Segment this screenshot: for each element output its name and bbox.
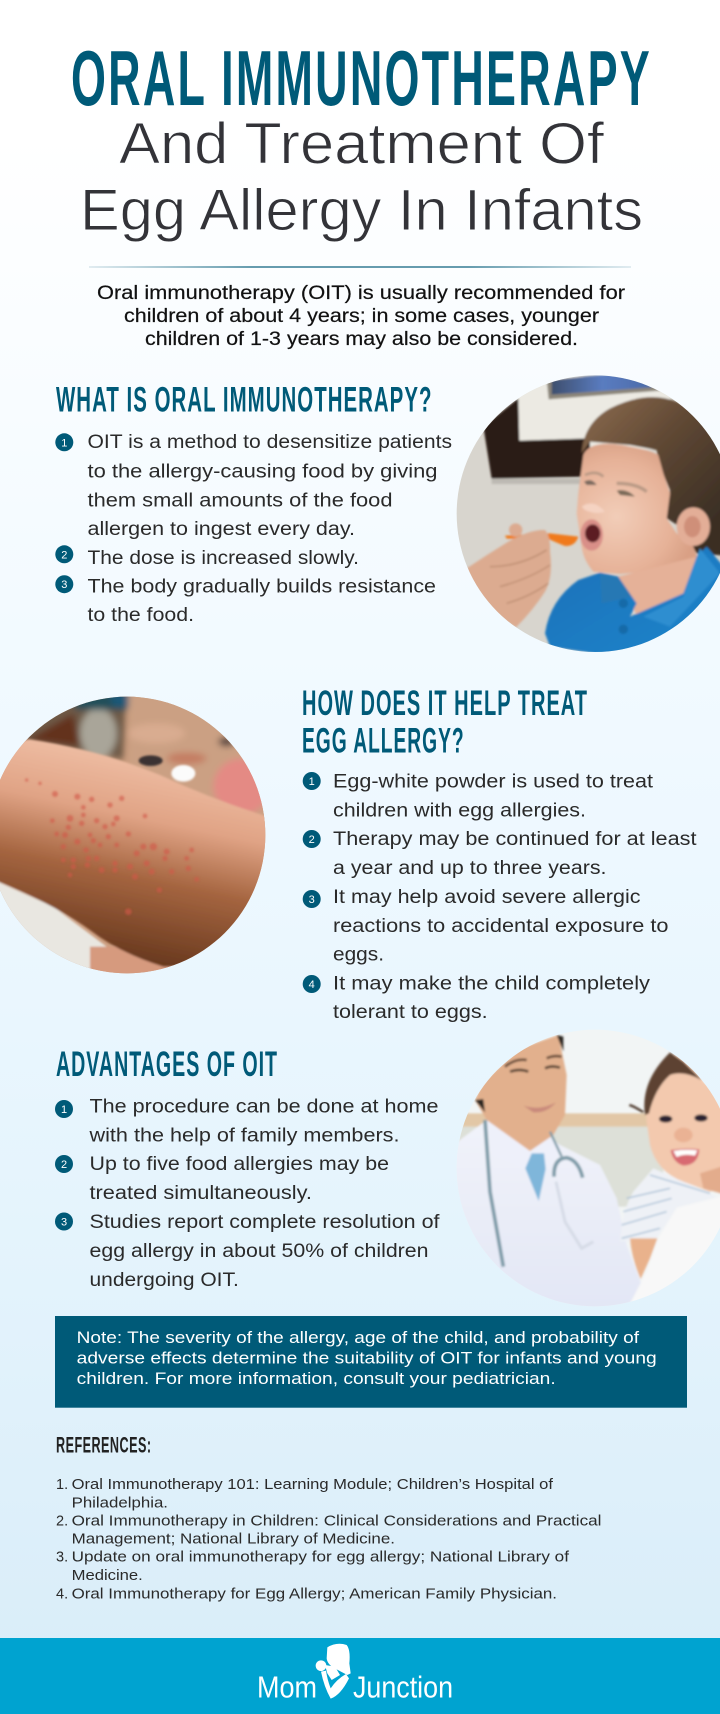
references list: 4. <box>56 1586 68 1602</box>
intro text <box>97 283 626 350</box>
references heading: REFERENCES: <box>56 1433 152 1458</box>
list item 1: with the help of family members. <box>88 1126 400 1146</box>
list item 1: children with egg allergies. <box>333 801 586 822</box>
list item 2: a year and up to three years. <box>333 858 606 879</box>
photo: rash on infant arm <box>0 696 266 974</box>
references list: Oral Immunotherapy in Children: Clinical Considerations and Practical <box>72 1513 602 1529</box>
intro text: children of 1-3 years may also be considered. <box>145 329 578 350</box>
list item 3: 3 <box>309 894 315 906</box>
footer band <box>0 1638 720 1714</box>
list item 1: Egg-white powder is used to treat <box>333 772 654 792</box>
list item 2: Up to five food allergies may be <box>90 1154 389 1175</box>
list item 1: them small amounts of the food <box>88 490 392 511</box>
list item 1: The procedure can be done at home <box>90 1096 438 1117</box>
list item 3: The body gradually builds resistance <box>88 577 436 598</box>
references list <box>56 1477 602 1602</box>
photo: boy being fed from a spoon <box>450 370 720 660</box>
list item 3 <box>303 887 668 966</box>
list item 3: It may help avoid severe allergic <box>333 887 640 908</box>
photo: doctor with smiling baby <box>450 1025 720 1315</box>
references list: Oral Immunotherapy 101: Learning Module; Children’s Hospital of <box>72 1477 554 1493</box>
list item 1 <box>303 772 654 822</box>
title: Egg Allergy In Infants <box>80 178 643 243</box>
intro text: children of about 4 years; in some cases, younger <box>124 306 600 327</box>
references list: Management; National Library of Medicine. <box>72 1532 395 1548</box>
list item 3 <box>55 575 436 626</box>
list item 2: Therapy may be continued for at least <box>333 829 697 850</box>
references list: Philadelphia. <box>72 1495 168 1511</box>
list item 4: 4 <box>309 979 315 991</box>
list item 2: 2 <box>61 549 67 561</box>
references list: Oral Immunotherapy for Egg Allergy; American Family Physician. <box>72 1586 557 1602</box>
references list: 3. <box>56 1550 68 1566</box>
list item 1: 1 <box>309 776 315 788</box>
list item 1: allergen to ingest every day. <box>88 519 355 540</box>
callout: note: adverse effects determine the suitability of OIT for infants and young <box>77 1350 657 1368</box>
references list: 2. <box>56 1513 68 1529</box>
panel: advantages of OIT <box>55 1044 440 1291</box>
heading: how does it help: EGG ALLERGY? <box>302 721 465 761</box>
title: And Treatment Of <box>119 111 605 176</box>
list item 2: The dose is increased slowly. <box>88 548 359 569</box>
list item 1 <box>55 432 452 540</box>
list item 2: treated simultaneously. <box>90 1183 312 1204</box>
list item 2 <box>303 829 697 879</box>
list item 3: 3 <box>61 1216 67 1228</box>
logo: MomJunction <box>257 1644 453 1704</box>
list item 1: 1 <box>61 437 67 449</box>
list item 3: reactions to accidental exposure to <box>333 916 668 937</box>
heading: how does it help <box>302 683 588 761</box>
list item 1: to the allergy-causing food by giving <box>88 461 438 482</box>
intro text: Oral immunotherapy (OIT) is usually recommended for <box>97 283 626 304</box>
list item 3: egg allergy in about 50% of children <box>90 1241 428 1262</box>
heading: what is oral immunotherapy: WHAT IS ORAL IMMUNOTHERAPY? <box>56 380 432 420</box>
list item 2: 2 <box>309 834 315 846</box>
logo: MomJunction: Mom <box>257 1670 317 1704</box>
list item 3: undergoing OIT. <box>90 1270 239 1291</box>
references list: 1. <box>56 1477 68 1493</box>
list item 3: 3 <box>61 579 67 591</box>
panel: how does it help treat egg allergy <box>302 683 697 1023</box>
callout: note: children. For more information, consult your pediatrician. <box>77 1370 556 1388</box>
list item 1: OIT is a method to desensitize patients <box>88 432 452 453</box>
list item 4: It may make the child completely <box>333 974 651 994</box>
callout: note <box>55 1316 687 1408</box>
list item 4 <box>303 974 651 1023</box>
list item 3: to the food. <box>88 605 194 626</box>
list item 3: eggs. <box>333 944 384 966</box>
list item 3: Studies report complete resolution of <box>90 1212 440 1233</box>
list item 1 <box>55 1096 438 1146</box>
list item 2 <box>55 1154 389 1204</box>
heading: advantages of OIT: ADVANTAGES OF OIT <box>56 1044 278 1084</box>
list item 4: tolerant to eggs. <box>333 1002 488 1023</box>
list item 1: 1 <box>61 1104 67 1116</box>
list item 3 <box>55 1212 440 1291</box>
references list: Medicine. <box>72 1568 143 1584</box>
references list: Update on oral immunotherapy for egg allergy; National Library of <box>72 1550 570 1566</box>
list item 2: 2 <box>61 1159 67 1171</box>
title <box>71 34 652 243</box>
panel: what is oral immunotherapy <box>55 380 452 626</box>
callout: note: Note: The severity of the allergy, age of the child, and probability of <box>77 1329 639 1347</box>
logo: MomJunction: Junction <box>353 1670 453 1704</box>
